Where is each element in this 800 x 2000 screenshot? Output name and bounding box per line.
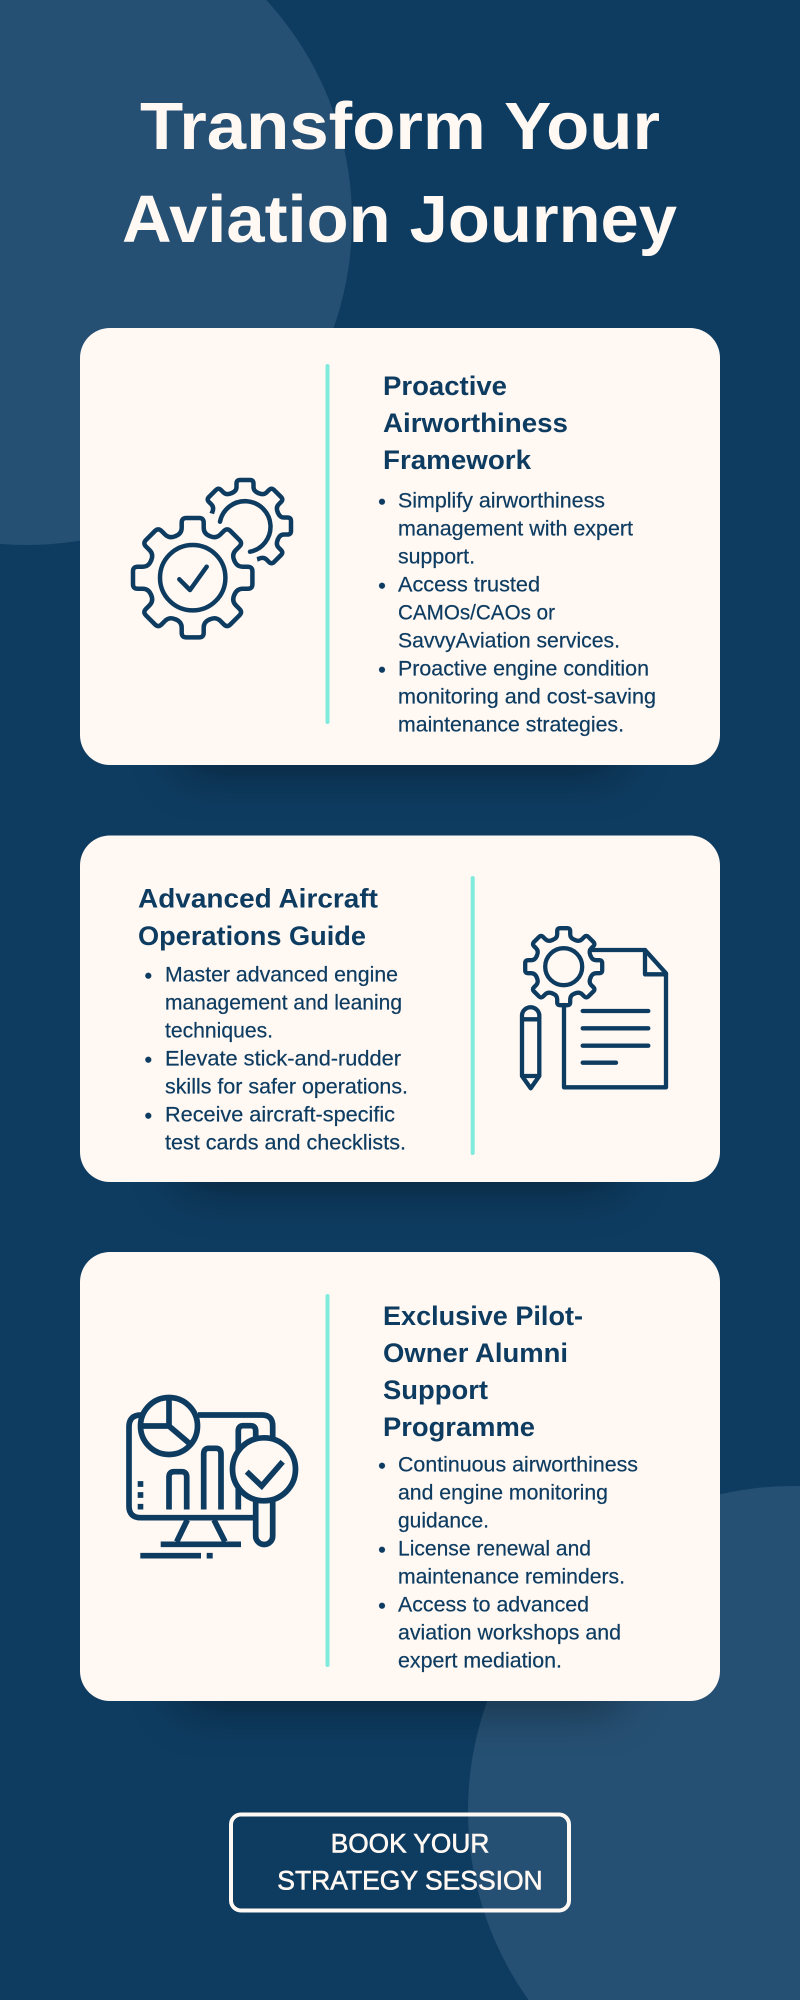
heading (383, 371, 568, 475)
icon: gears with check (126, 480, 291, 645)
bullet list: test cards and checklists. (165, 1132, 406, 1155)
panel: advanced aircraft operations guide (80, 836, 720, 1187)
heading: Proactive (383, 371, 507, 401)
bullet list: License renewal and (398, 1538, 591, 1561)
bullet list: Access to advanced (398, 1594, 589, 1617)
bullet list (379, 490, 656, 737)
heading: Framework (383, 445, 532, 475)
panel: proactive airworthiness framework (80, 328, 720, 770)
heading: Airworthiness (383, 408, 568, 438)
bullet list: maintenance strategies. (398, 714, 624, 737)
heading: Support (383, 1375, 488, 1405)
bullet list: Simplify airworthiness (398, 490, 605, 513)
bullet list: management with expert (398, 518, 633, 541)
heading: Owner Alumni (383, 1338, 568, 1368)
bullet list: Elevate stick-and-rudder (165, 1048, 401, 1071)
heading: Exclusive Pilot- (383, 1301, 583, 1331)
title: Transform Your (140, 89, 660, 164)
bullet list: Continuous airworthiness (398, 1454, 638, 1477)
icon: document with gear and pencil (522, 928, 666, 1088)
title: Aviation Journey (122, 182, 677, 257)
button: book your strategy session: BOOK YOUR (331, 1829, 489, 1859)
button: book your strategy session (231, 1814, 569, 1910)
bullet list: Access trusted (398, 574, 540, 597)
bullet list: expert mediation. (398, 1650, 562, 1673)
bullet list: skills for safer operations. (165, 1076, 408, 1099)
bullet list: aviation workshops and (398, 1622, 621, 1645)
decorative circle bottom right (468, 1486, 800, 2000)
bullet list: maintenance reminders. (398, 1566, 625, 1589)
heading (138, 884, 378, 951)
bullet list (379, 1454, 638, 1673)
heading: Advanced Aircraft (138, 884, 378, 914)
bullet list: techniques. (165, 1020, 273, 1043)
bullet list (145, 964, 408, 1155)
title (122, 89, 677, 257)
heading (383, 1301, 583, 1442)
bullet list: guidance. (398, 1510, 489, 1533)
icon: monitor with charts and magnifier (129, 1398, 296, 1556)
heading: Programme (383, 1412, 535, 1442)
bullet list: CAMOs/CAOs or (398, 602, 555, 625)
button: book your strategy session: STRATEGY SESSION (277, 1865, 543, 1895)
bullet list: Receive aircraft-specific (165, 1104, 395, 1127)
bullet list: support. (398, 546, 475, 569)
bullet list: management and leaning (165, 992, 402, 1015)
bullet list: and engine monitoring (398, 1482, 608, 1505)
panel: exclusive pilot-owner alumni support programme (80, 1252, 720, 1706)
decorative circle top left (0, 0, 352, 545)
bullet list: Proactive engine condition (398, 658, 649, 681)
bullet list: monitoring and cost-saving (398, 686, 656, 709)
bullet list: Master advanced engine (165, 964, 398, 987)
heading: Operations Guide (138, 921, 366, 951)
bullet list: SavvyAviation services. (398, 630, 620, 653)
